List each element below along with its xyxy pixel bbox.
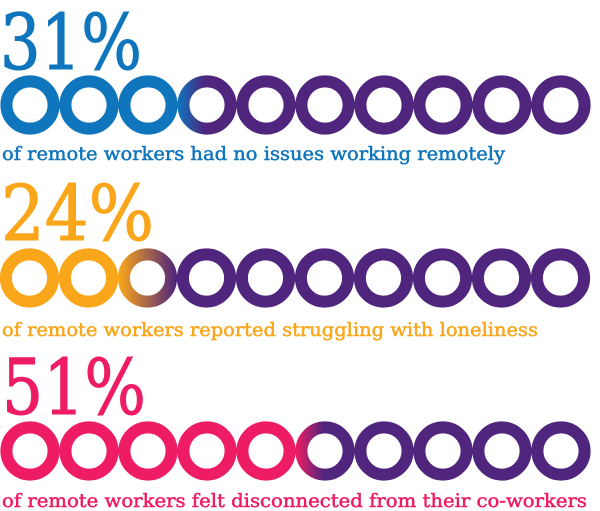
panel: 31% no issues — [0, 0, 585, 165]
ring row: 24 percent — [6, 254, 584, 302]
percentage: 51%: 51% — [2, 344, 146, 433]
caption: loneliness: of remote workers reported struggling with loneliness — [2, 319, 538, 341]
ring row: 31 percent — [6, 81, 585, 129]
panel: 24% loneliness — [1, 170, 584, 341]
ring row: 51 percent — [6, 427, 585, 475]
percentage: 31%: 31% — [0, 0, 142, 88]
percentage: 24%: 24% — [1, 170, 154, 259]
caption: no issues: of remote workers had no issues working remotely — [2, 143, 505, 165]
panel: 51% disconnected — [2, 344, 587, 511]
